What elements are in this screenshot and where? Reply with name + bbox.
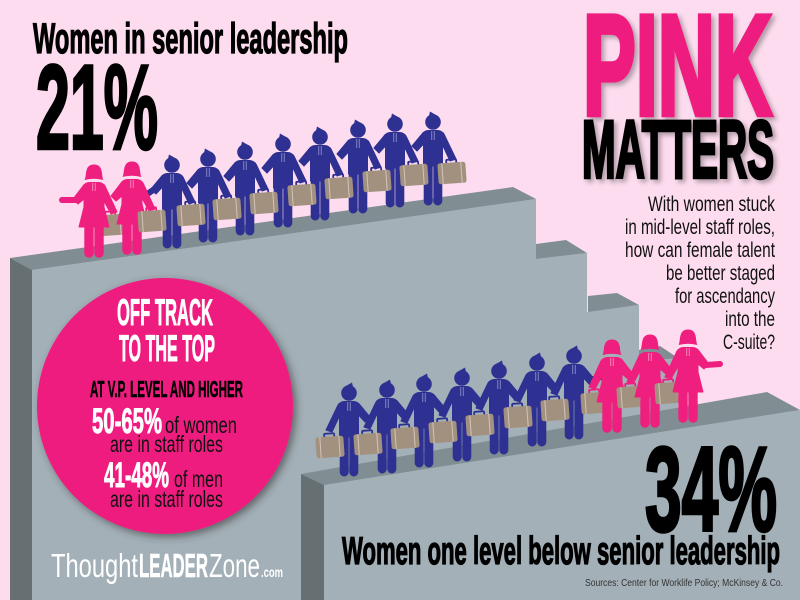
men statistic (104, 456, 223, 512)
logo: ThoughtLeaderZone.com: LEADER (139, 547, 208, 584)
figures: top row, senior leadership (62, 112, 467, 253)
men statistic: 41-48% (104, 456, 169, 495)
panel: off track to the top: TO THE TOP (119, 328, 215, 369)
logo: ThoughtLeaderZone.com (51, 547, 283, 584)
circle background (37, 278, 293, 534)
figures: bottom row, one level below (315, 330, 720, 472)
women statistic: of women (165, 412, 237, 438)
stat heading: women in senior leadership: Women in senior leadership (33, 15, 348, 63)
men statistic: of men (174, 466, 223, 492)
title (582, 0, 774, 196)
intro text (625, 193, 775, 354)
logo: ThoughtLeaderZone.com: Thought (51, 547, 138, 584)
panel: off track to the top (37, 278, 293, 534)
logo: ThoughtLeaderZone.com: .com (261, 564, 283, 580)
men statistic: are in staff roles (110, 486, 223, 512)
circle heading (117, 292, 215, 369)
women statistic: 50-65% (92, 402, 162, 441)
logo: ThoughtLeaderZone.com: Zone (209, 547, 260, 584)
intro text: C-suite? (723, 331, 775, 354)
intro text: into the (725, 308, 775, 331)
panel: off track to the top: OFF TRACK (117, 292, 213, 333)
stat number: 21%: 21% (36, 40, 158, 174)
women statistic: are in staff roles (110, 431, 223, 457)
women statistic (92, 402, 237, 457)
circle subheading: AT V.P. LEVEL AND HIGHER (90, 376, 243, 402)
staircase: front block (301, 392, 800, 600)
staircase: back wall (10, 187, 678, 600)
